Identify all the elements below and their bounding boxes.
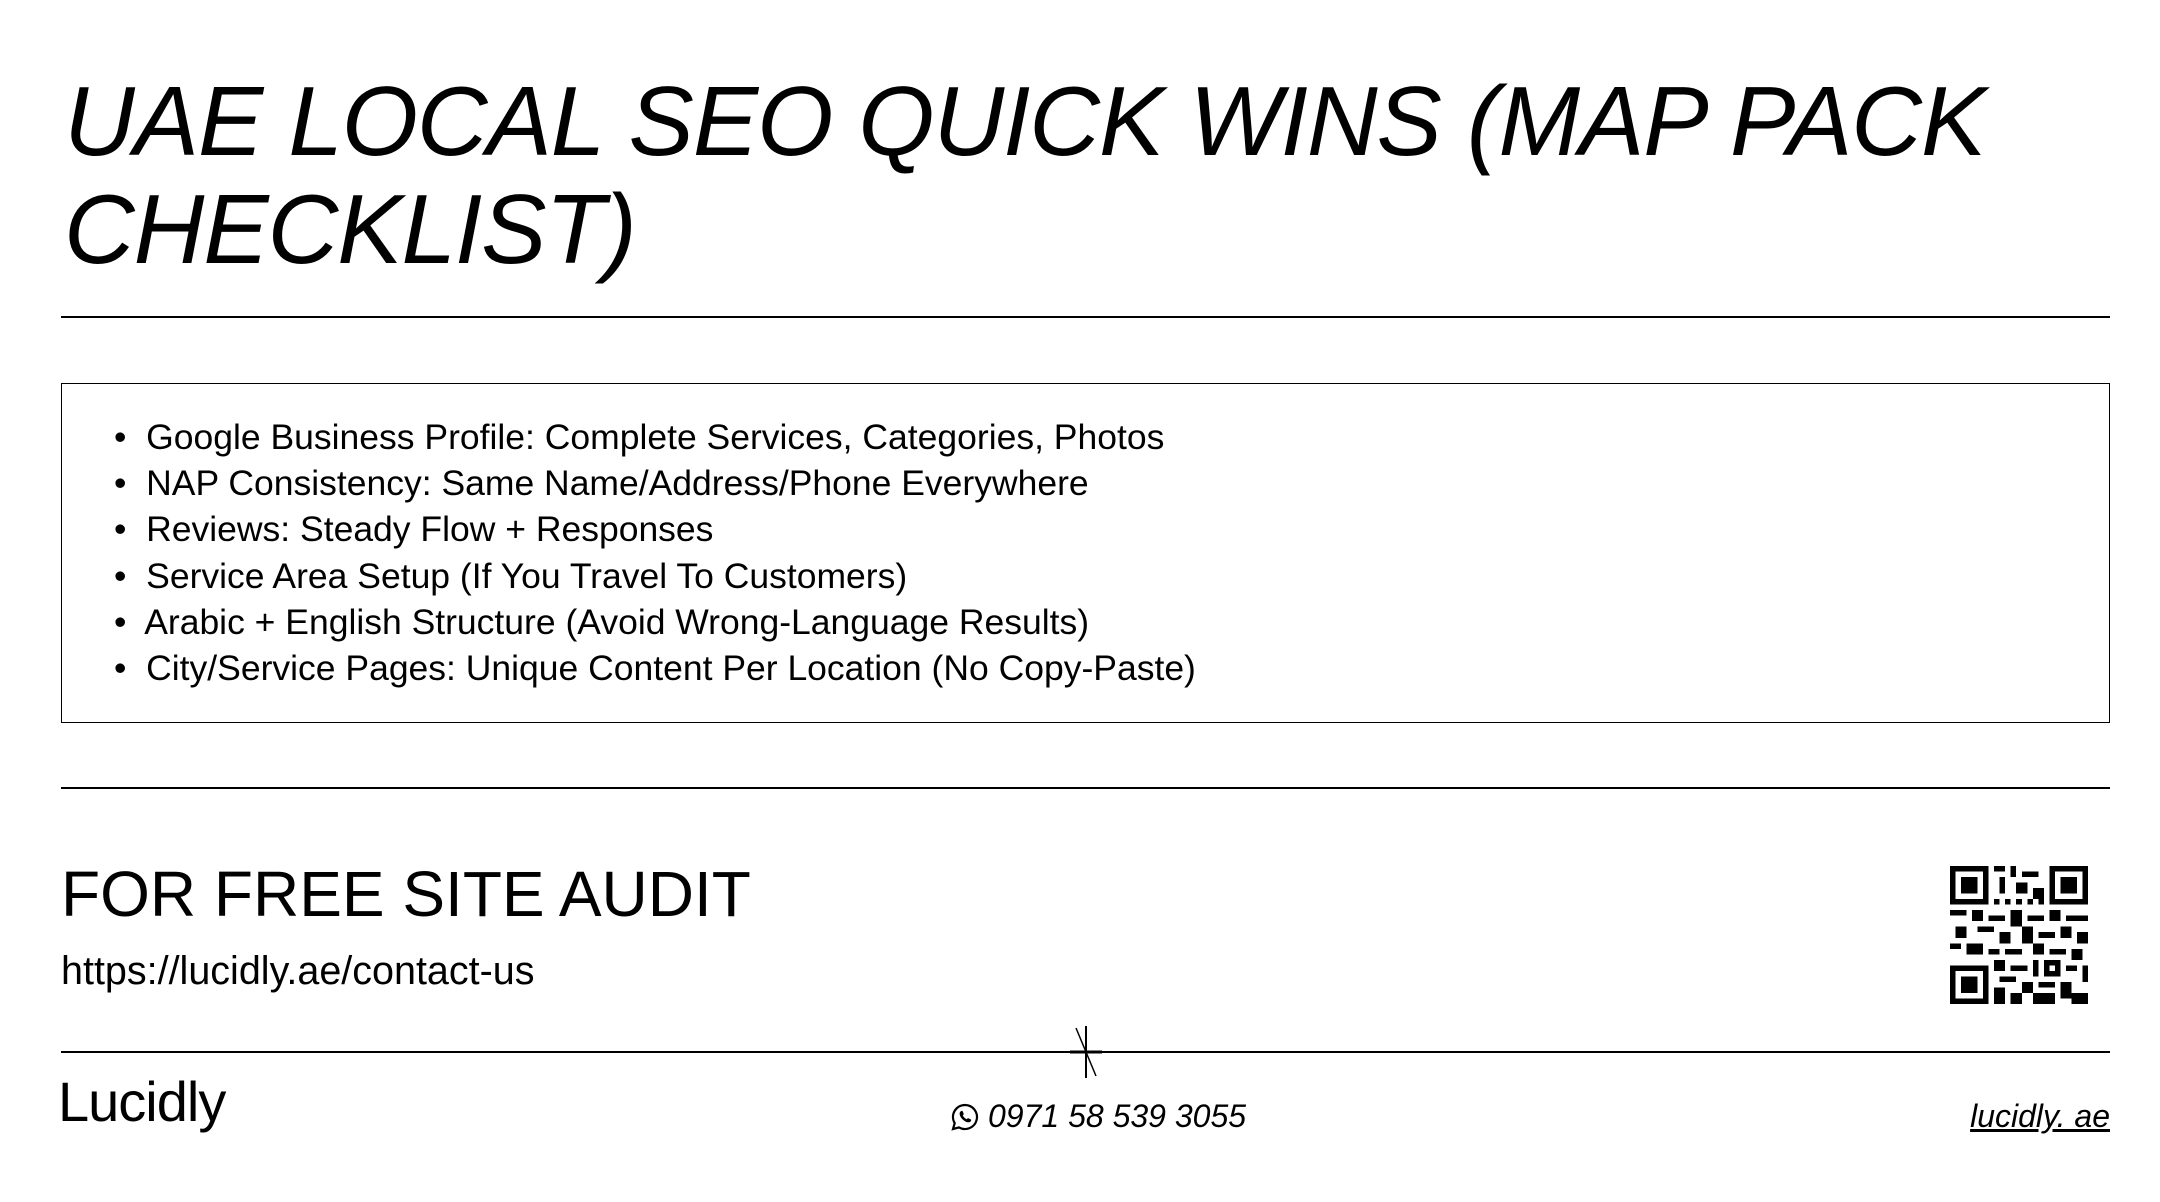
icon: sparkle cross: [1070, 1026, 1102, 1078]
url: https://lucidly.ae/contact-us: [61, 949, 534, 993]
website link: lucidly. ae: [1970, 1098, 2110, 1134]
checklist items: • Google Business Profile: Complete Services, Categories, Photos: [114, 417, 1164, 457]
panel: checklist: [61, 383, 2110, 723]
checklist items: • Reviews: Steady Flow + Responses: [114, 509, 713, 549]
title: CHECKLIST): [64, 174, 636, 284]
checklist items: • NAP Consistency: Same Name/Address/Phone Everywhere: [114, 463, 1089, 503]
checklist items: [114, 417, 1196, 688]
title: [64, 66, 1990, 284]
checklist items: • City/Service Pages: Unique Content Per Location (No Copy-Paste): [114, 648, 1196, 688]
checklist items: • Service Area Setup (If You Travel To Customers): [114, 556, 907, 596]
title: UAE LOCAL SEO QUICK WINS (MAP PACK: [64, 66, 1985, 176]
icon: whatsapp: [951, 1104, 978, 1131]
heading: free site audit: FOR FREE SITE AUDIT: [61, 858, 751, 930]
icon: QR code: [1950, 866, 2088, 1004]
logo: Lucidly: [58, 1070, 225, 1133]
checklist items: • Arabic + English Structure (Avoid Wrong-Language Results): [114, 602, 1089, 642]
phone contact: 0971 58 539 3055: [988, 1098, 1246, 1134]
